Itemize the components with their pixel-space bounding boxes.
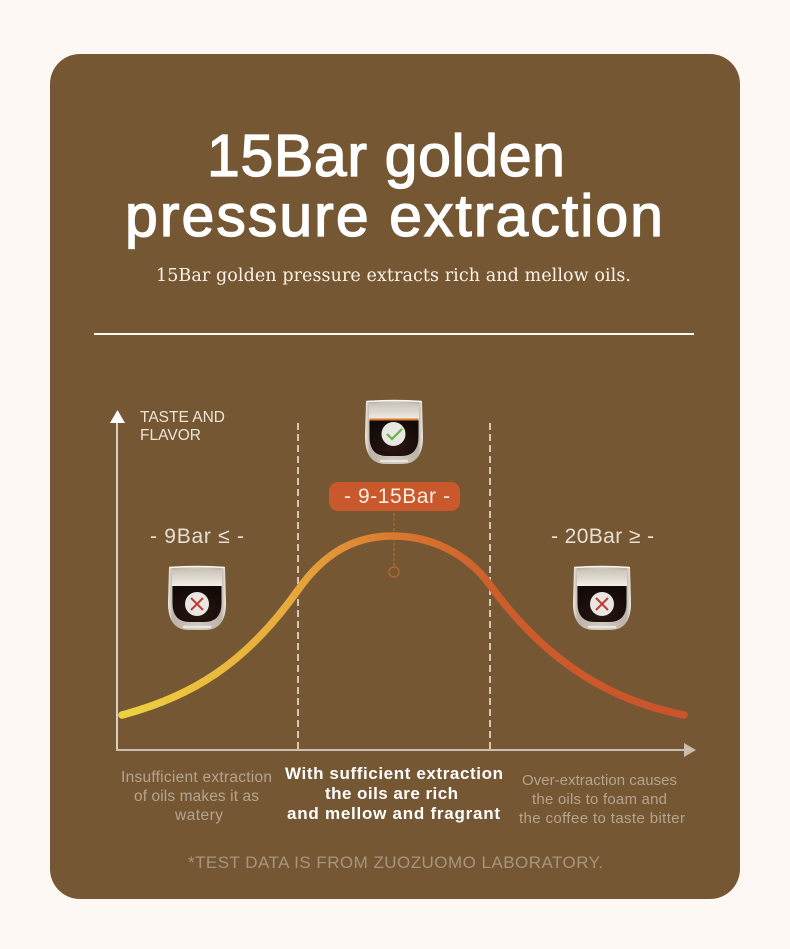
chart: taste and flavor against pressure [110,400,696,757]
badge: 9-15Bar: - 9-15Bar - [344,485,450,508]
caption: insufficient extraction: Insufficient extraction [121,769,272,786]
zone boundary: left [297,423,299,750]
zone boundary: right [489,423,491,750]
icon: under-extracted glass with cross [168,566,226,630]
panel: brown card [50,54,740,899]
peak marker [389,513,399,577]
title second line: pressure extraction [125,183,663,249]
caption: insufficient extraction [121,769,272,824]
caption: over-extraction: Over-extraction causes [522,772,677,789]
title: 15Bar golden [207,123,565,189]
caption: over-extraction: the oils to foam and [532,791,667,808]
footnote: *TEST DATA IS FROM ZUOZUOMO LABORATORY. [188,853,603,872]
caption: sufficient extraction [285,764,503,823]
icon: good espresso glass with check [365,400,423,464]
caption: insufficient extraction: watery [174,807,223,824]
caption: insufficient extraction: of oils makes it as [134,788,259,805]
label: 9Bar or less: - 9Bar ≤ - [150,525,244,548]
caption: sufficient extraction: the oils are rich [325,784,458,803]
icon: over-extracted glass with cross [573,566,631,630]
label: 20Bar or more: - 20Bar ≥ - [551,525,654,548]
divider line [94,333,694,335]
y axis label [140,409,225,444]
x axis with arrow [116,743,696,757]
y axis label: FLAVOR [140,427,201,444]
caption: sufficient extraction: With sufficient extraction [285,764,503,783]
caption: sufficient extraction: and mellow and fragrant [287,804,500,823]
y axis with arrow [110,410,125,751]
subtitle: 15Bar golden pressure extracts rich and mellow oils. [156,266,631,286]
caption: over-extraction [519,772,685,827]
pressure curve [122,536,684,715]
badge: 9-15Bar [329,482,460,511]
caption: over-extraction: the coffee to taste bitter [519,810,685,827]
y axis label: TASTE AND [140,409,225,426]
